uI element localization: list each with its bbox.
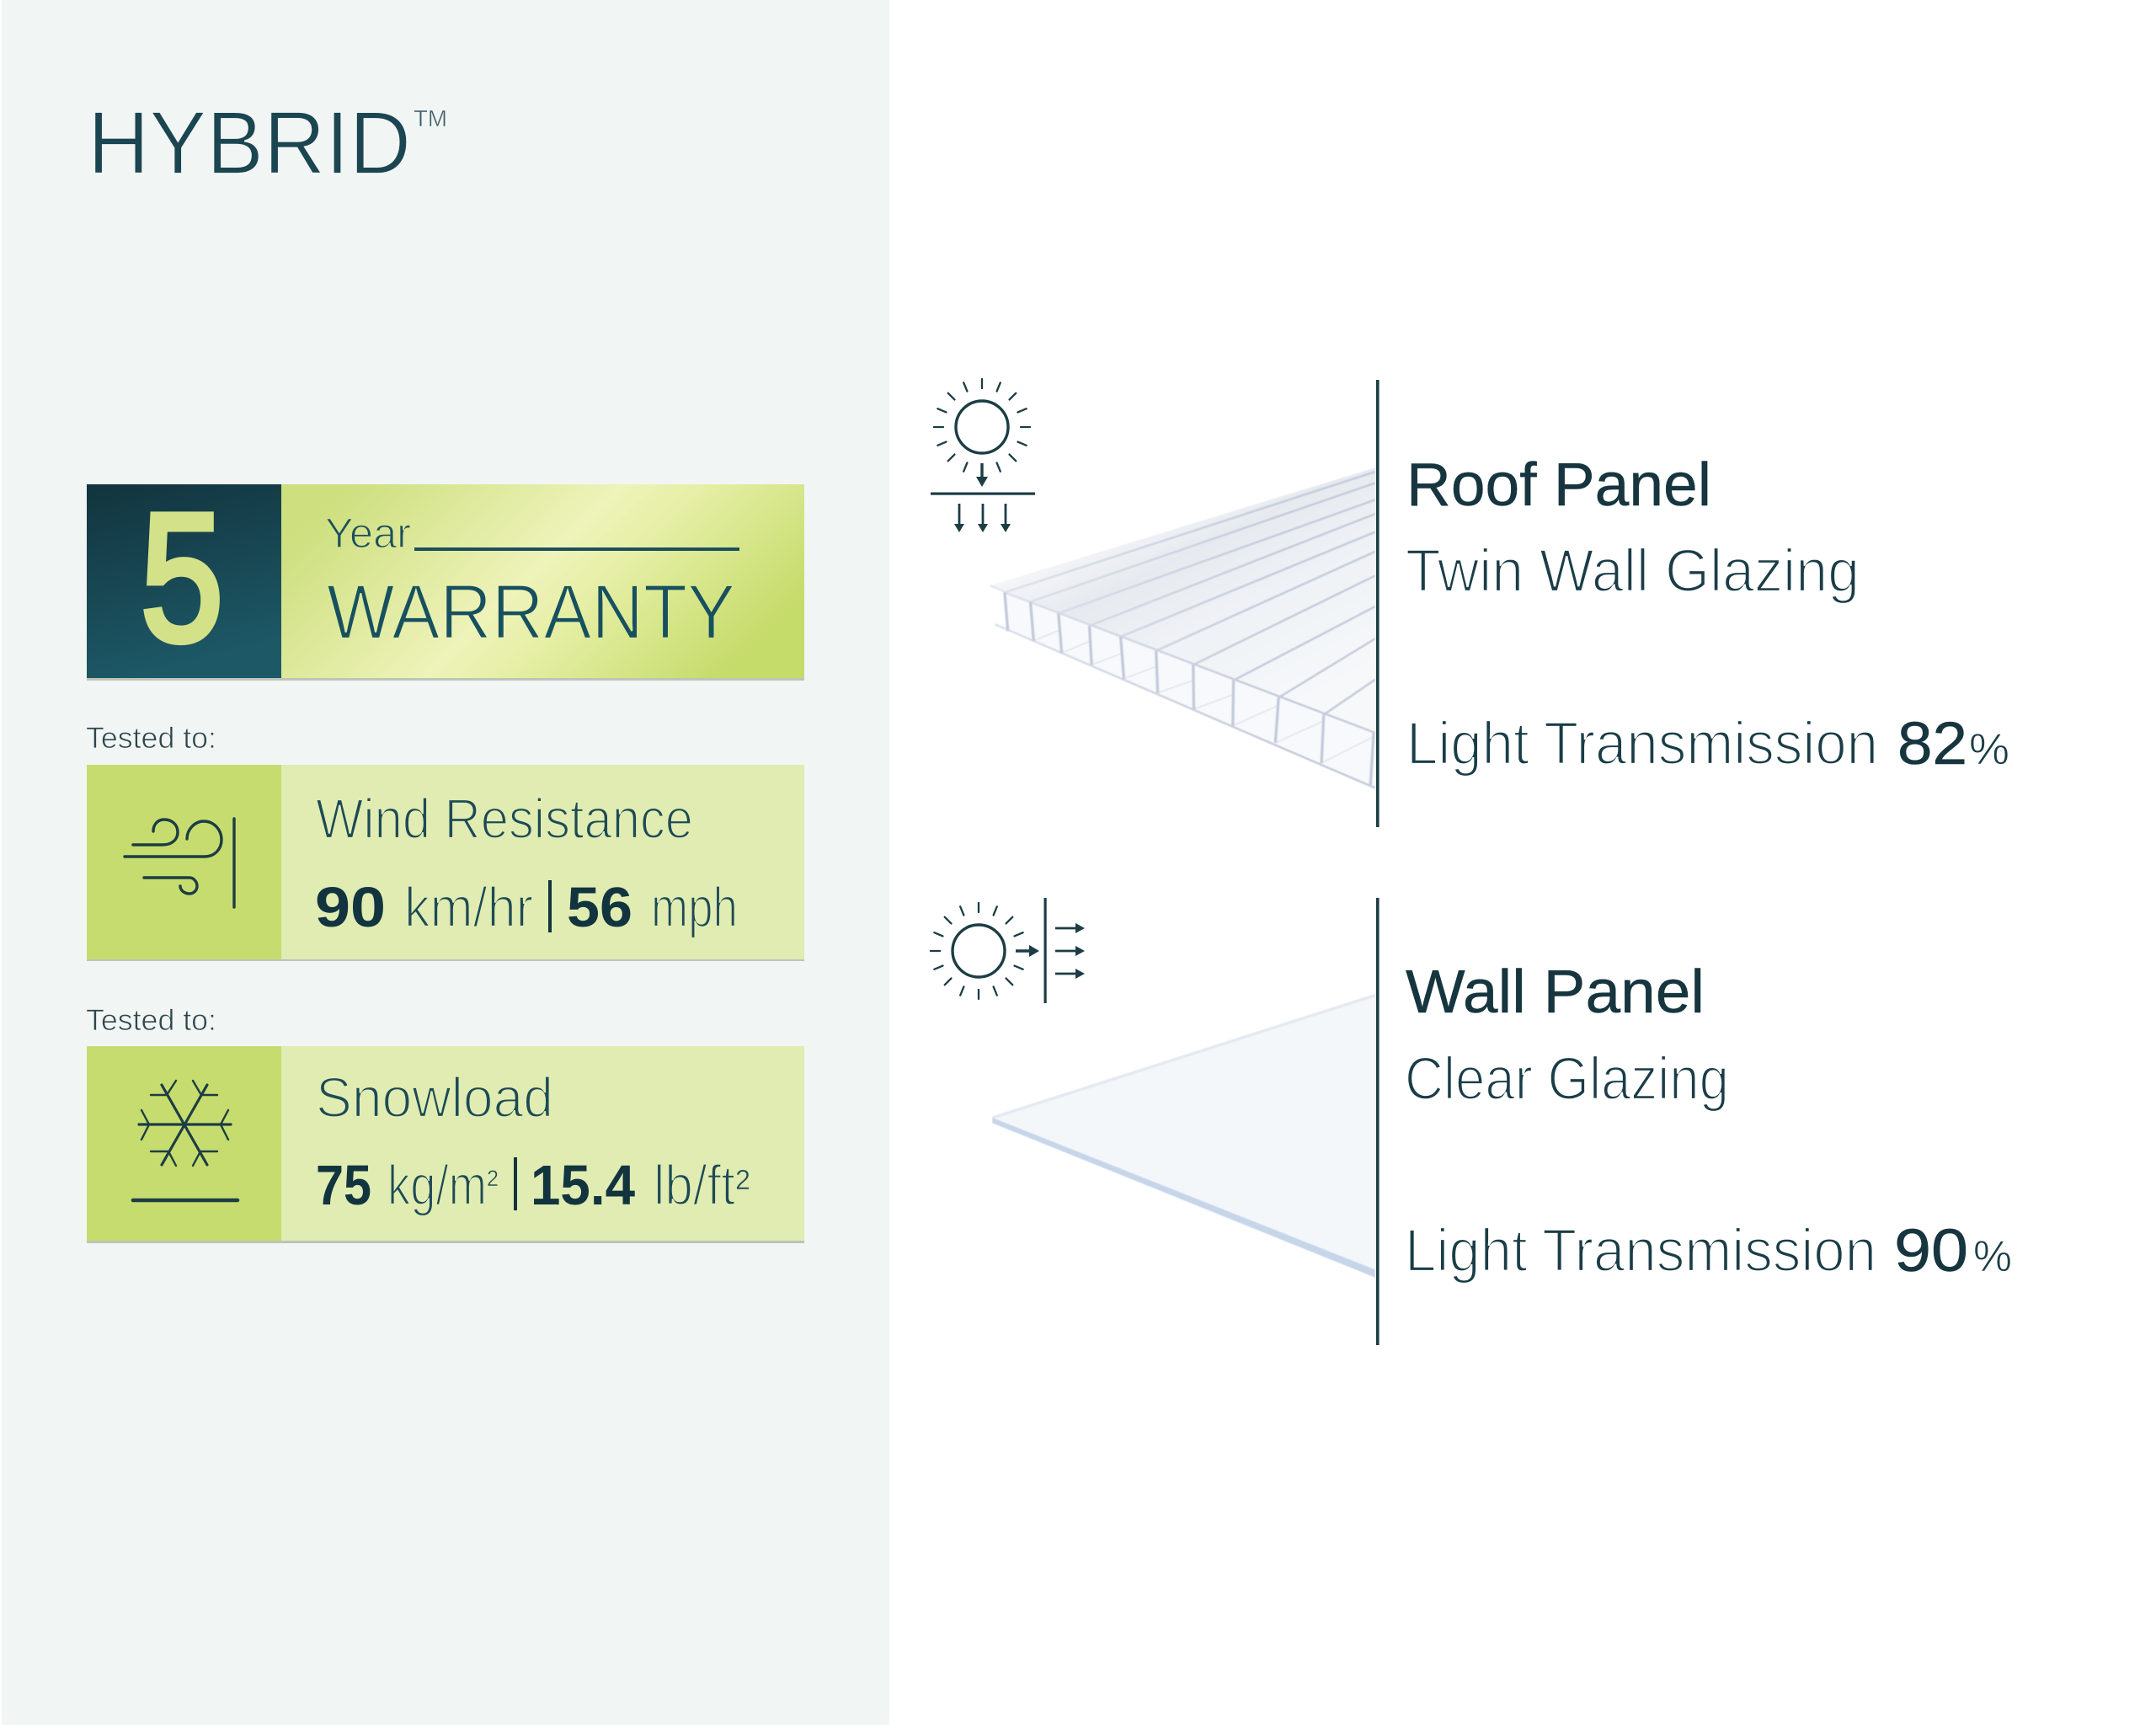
title: HYBRID: HYBRID <box>88 93 411 193</box>
snow values: 15.4 <box>531 1154 635 1217</box>
text: wall panel: 90 <box>1894 1218 1968 1284</box>
text: wall panel <box>1405 959 2012 1284</box>
warranty years numeral: 5 <box>141 475 223 679</box>
text: wall panel: Clear Glazing <box>1405 1046 1729 1113</box>
section: wall panel <box>931 898 2012 1345</box>
section: roof panel <box>931 379 2009 827</box>
image: twin wall sheet <box>990 467 1375 788</box>
warranty label: Year <box>325 510 411 557</box>
snow values: 2 <box>735 1164 750 1195</box>
text: roof panel: Twin Wall Glazing <box>1406 538 1860 605</box>
snow title: Snowload <box>316 1066 553 1130</box>
wind title: Wind Resistance <box>316 788 693 851</box>
wind values: km/hr <box>404 876 533 939</box>
text: roof panel: Roof Panel <box>1406 451 1711 519</box>
text: wall panel: % <box>1973 1232 2012 1281</box>
text: wall panel: Light Transmission <box>1405 1218 1876 1284</box>
text: roof panel: % <box>1969 725 2009 774</box>
warranty label: WARRANTY <box>327 569 735 655</box>
warranty label <box>325 510 739 655</box>
snow values <box>316 1154 750 1217</box>
wind values <box>315 876 738 939</box>
card: wind resistance <box>87 765 804 961</box>
label: tested to (snow): Tested to: <box>86 1004 216 1037</box>
text: wall panel: Wall Panel <box>1406 959 1705 1026</box>
card: snowload <box>87 1046 804 1243</box>
snow values: lb/ft <box>654 1154 735 1217</box>
icon: sun through wall <box>931 898 1085 1003</box>
wind values: 56 <box>567 876 632 939</box>
text: roof panel <box>1406 451 2009 777</box>
icon: sun through roof <box>931 379 1035 532</box>
snow values: kg/m <box>387 1154 487 1217</box>
icon: wind <box>125 819 234 907</box>
panel: left sidebar <box>2 0 889 1725</box>
snow values: 75 <box>316 1154 371 1217</box>
title: HYBRID: TM <box>414 105 447 131</box>
icon: snowflake <box>133 1081 237 1200</box>
image: clear sheet <box>992 995 1375 1278</box>
text: roof panel: 82 <box>1897 711 1967 777</box>
divider line: roof <box>1376 380 1380 827</box>
text: roof panel: Light Transmission <box>1406 711 1878 777</box>
warranty banner <box>87 475 804 681</box>
label: tested to (wind): Tested to: <box>86 722 216 755</box>
snow values: 2 <box>487 1166 499 1191</box>
divider line: wall <box>1376 898 1380 1345</box>
wind values: mph <box>651 876 738 939</box>
wind values: 90 <box>315 876 386 939</box>
